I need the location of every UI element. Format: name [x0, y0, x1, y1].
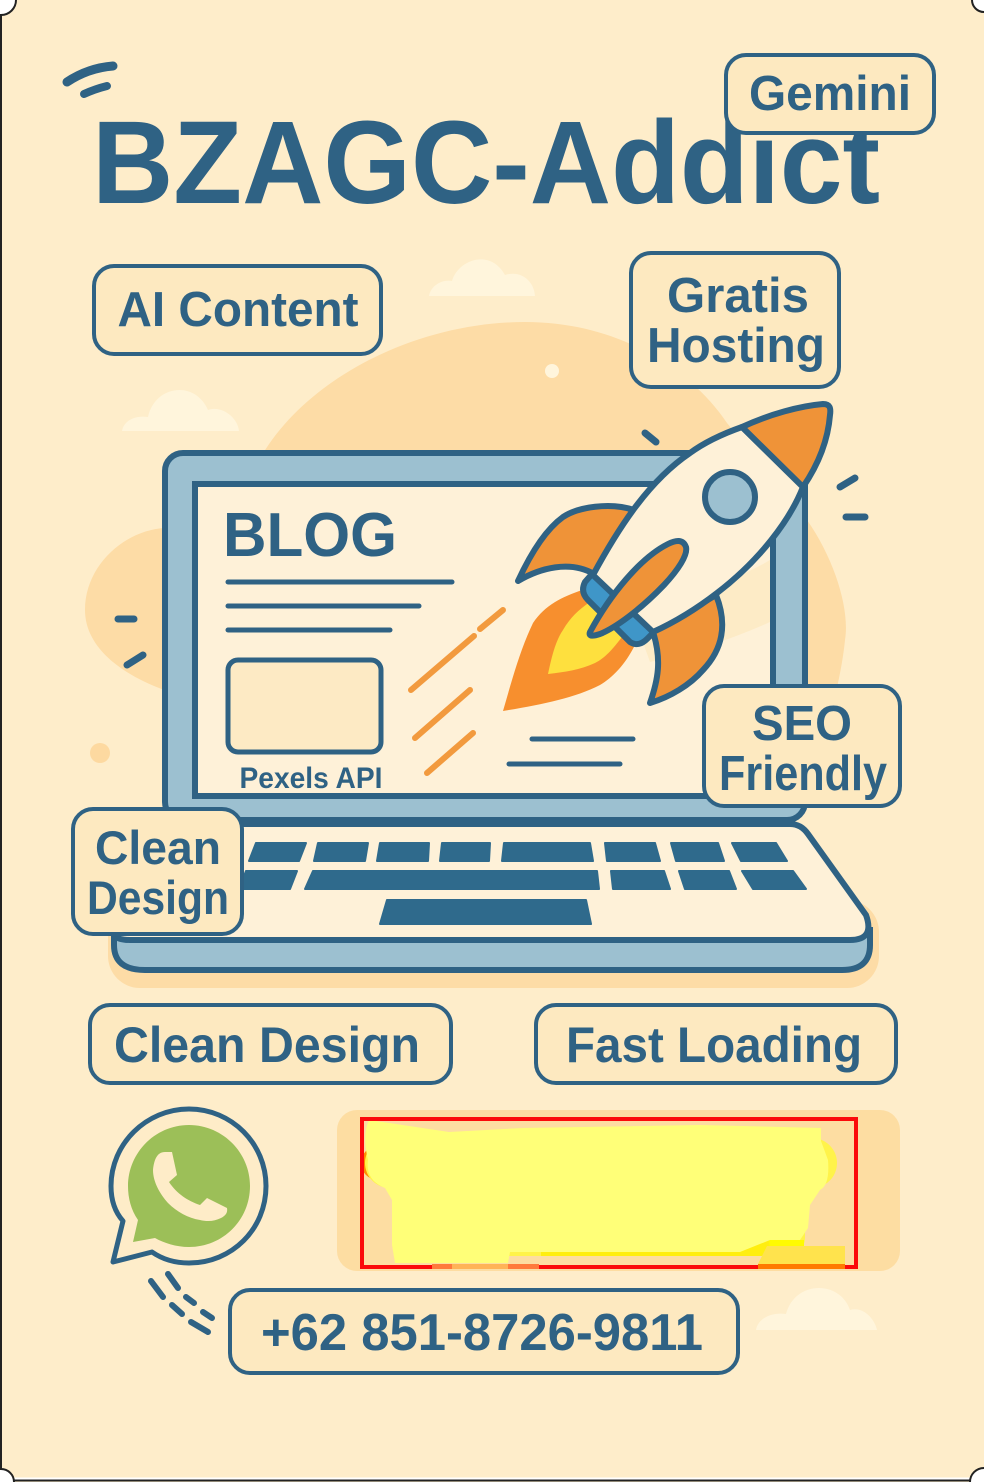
- badge: AI Content: [94, 266, 381, 354]
- badge: phone number: [230, 1290, 738, 1373]
- keyboard: [239, 843, 806, 924]
- rocket right fin: [650, 595, 722, 703]
- rocket nose: [742, 404, 830, 487]
- rocket left fin: [518, 506, 634, 581]
- badge: Clean Design (wide): Clean Design: [114, 1017, 420, 1073]
- Pexels API label: Pexels API: [240, 762, 382, 795]
- rocket window: [705, 472, 755, 522]
- redacted panel: [337, 1110, 900, 1271]
- badge: Clean Design (small): Design: [87, 871, 229, 924]
- rocket: [503, 404, 830, 711]
- blog heading: BLOG: [223, 501, 397, 570]
- badge: Fast Loading: [536, 1005, 896, 1083]
- screen pale band: [630, 560, 770, 662]
- badge: Clean Design (wide): [90, 1005, 451, 1083]
- badge: Gemini: Gemini: [749, 67, 911, 121]
- laptop screen: [165, 453, 805, 820]
- blog text lines: [228, 582, 633, 764]
- badge: Clean Design (small): [73, 809, 242, 934]
- badge: phone number: +62 851-8726-9811: [261, 1304, 703, 1362]
- rocket flame: [503, 590, 635, 711]
- icon: whatsapp: [111, 1109, 266, 1263]
- whatsapp dashed trail: [151, 1274, 212, 1332]
- badge: Gratis Hosting: Hosting: [647, 319, 825, 373]
- clouds: [122, 259, 877, 1330]
- badge: Fast Loading: Fast Loading: [566, 1017, 862, 1073]
- badge: Gemini: [726, 55, 934, 133]
- badge: AI Content: AI Content: [118, 283, 358, 337]
- badge: Clean Design (small): Clean: [95, 821, 221, 874]
- rocket nozzle: [583, 574, 654, 644]
- background blobs: [85, 322, 879, 988]
- laptop base: [113, 824, 870, 970]
- image placeholder: [228, 660, 381, 752]
- rocket center fin: [590, 541, 686, 636]
- rocket body: [593, 427, 803, 632]
- speed lines: [411, 610, 503, 773]
- decorative dashes: [67, 66, 865, 665]
- title: BZAGC-Addict: [92, 97, 880, 229]
- dots: [545, 364, 559, 378]
- badge: SEO Friendly: [704, 686, 900, 806]
- badge: SEO Friendly: SEO: [752, 697, 852, 751]
- badge: Gratis Hosting: [631, 253, 839, 387]
- badge: SEO Friendly: Friendly: [719, 747, 887, 801]
- badge: Gratis Hosting: Gratis: [667, 269, 809, 323]
